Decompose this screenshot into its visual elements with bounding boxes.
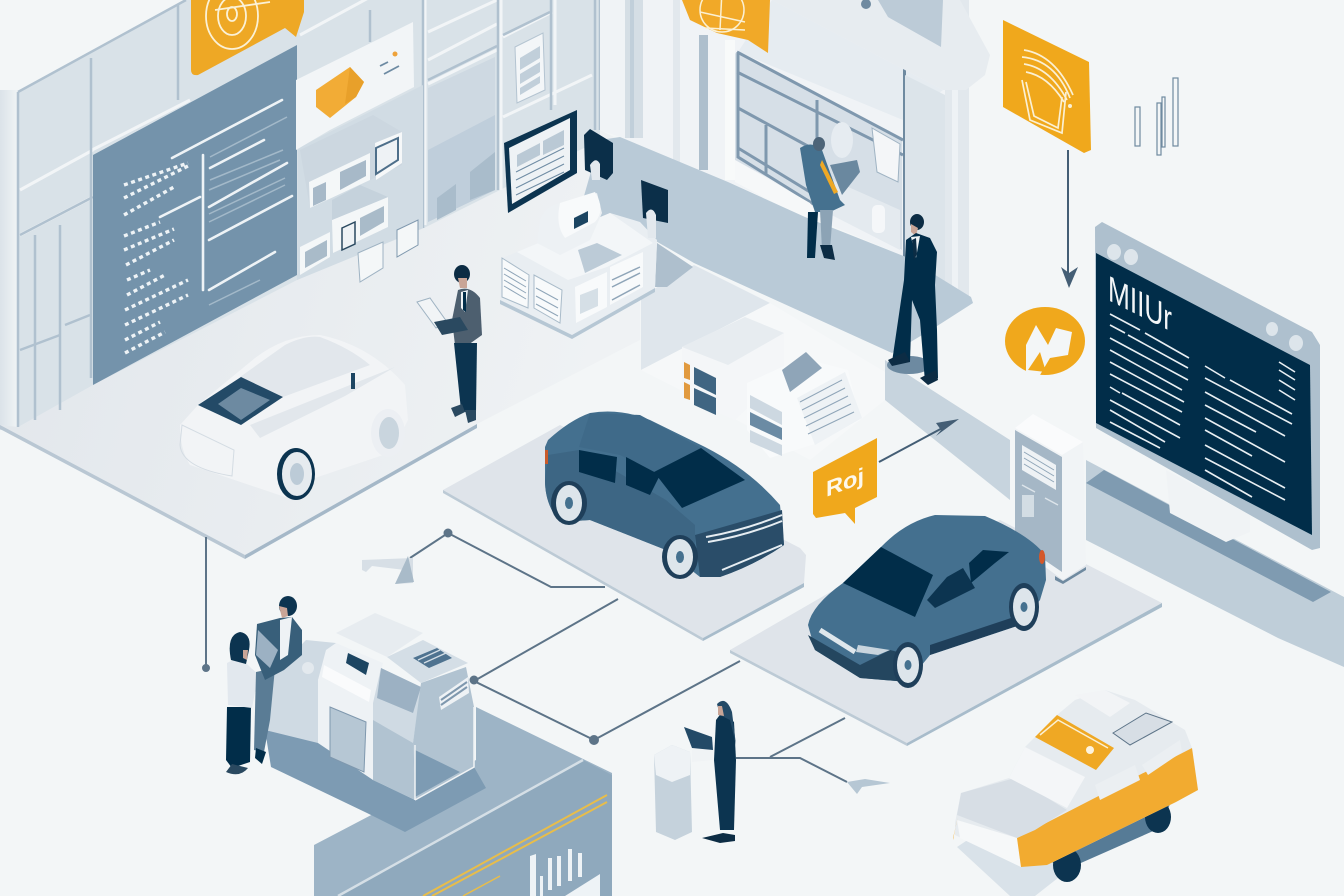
panel: gray strip under monitor (1086, 460, 1344, 667)
panel: white service desk (500, 192, 693, 339)
illustration: yellow car (953, 690, 1198, 896)
icon: wall device right (641, 180, 668, 238)
icon: wall device left (584, 129, 613, 180)
panel: back wall left (18, 0, 600, 427)
icon: key shape (362, 556, 414, 584)
panel: dark information board (93, 45, 297, 385)
panel: monitor (1095, 222, 1320, 550)
panel: car platform right (730, 520, 1162, 746)
figure: couple at machine (226, 596, 302, 774)
arrow: sign to circle (1061, 150, 1078, 288)
panel: white sign with yellow badge (296, 22, 414, 150)
figure: man in dark suit (887, 214, 938, 385)
icon: yellow circle badge (1005, 307, 1085, 385)
panel: bottom block (314, 707, 612, 896)
panel: car platform centre (443, 425, 806, 641)
panel: printers (682, 317, 862, 458)
callout: yellow target tag (191, 0, 304, 75)
panel: main floor (0, 130, 640, 559)
callout: ROI tag: Roj (826, 462, 864, 502)
icon: wall document (515, 33, 545, 103)
panel: white floor area (641, 303, 885, 460)
connector lines (203, 530, 847, 782)
panel: ticket machine (265, 613, 474, 800)
illustration: dark car right (808, 515, 1046, 688)
figure: man at window (800, 137, 860, 260)
panel: shelf boxes (300, 115, 418, 282)
icon: top centre yellow tag (682, 0, 770, 53)
figure: man with papers (417, 265, 482, 423)
panel: machine floor shadow (265, 730, 486, 832)
arrow: to monitor (879, 419, 959, 462)
callout: ROI tag (813, 438, 877, 524)
icon: small bars top right (1135, 78, 1178, 155)
panel: small wall monitor (504, 110, 577, 213)
panel: info kiosk (1015, 414, 1086, 584)
chart: mini bars (530, 849, 600, 896)
panel: central right building (600, 0, 990, 300)
figure: woman with tablet (654, 701, 736, 843)
illustration: white car (180, 335, 408, 500)
arrow: fletched end (847, 779, 890, 794)
illustration: dark car centre (545, 412, 784, 579)
screen title: MIIUr (1108, 268, 1172, 341)
panel: gray walkway (580, 137, 1010, 500)
icon: yellow sign top right (1003, 20, 1091, 153)
